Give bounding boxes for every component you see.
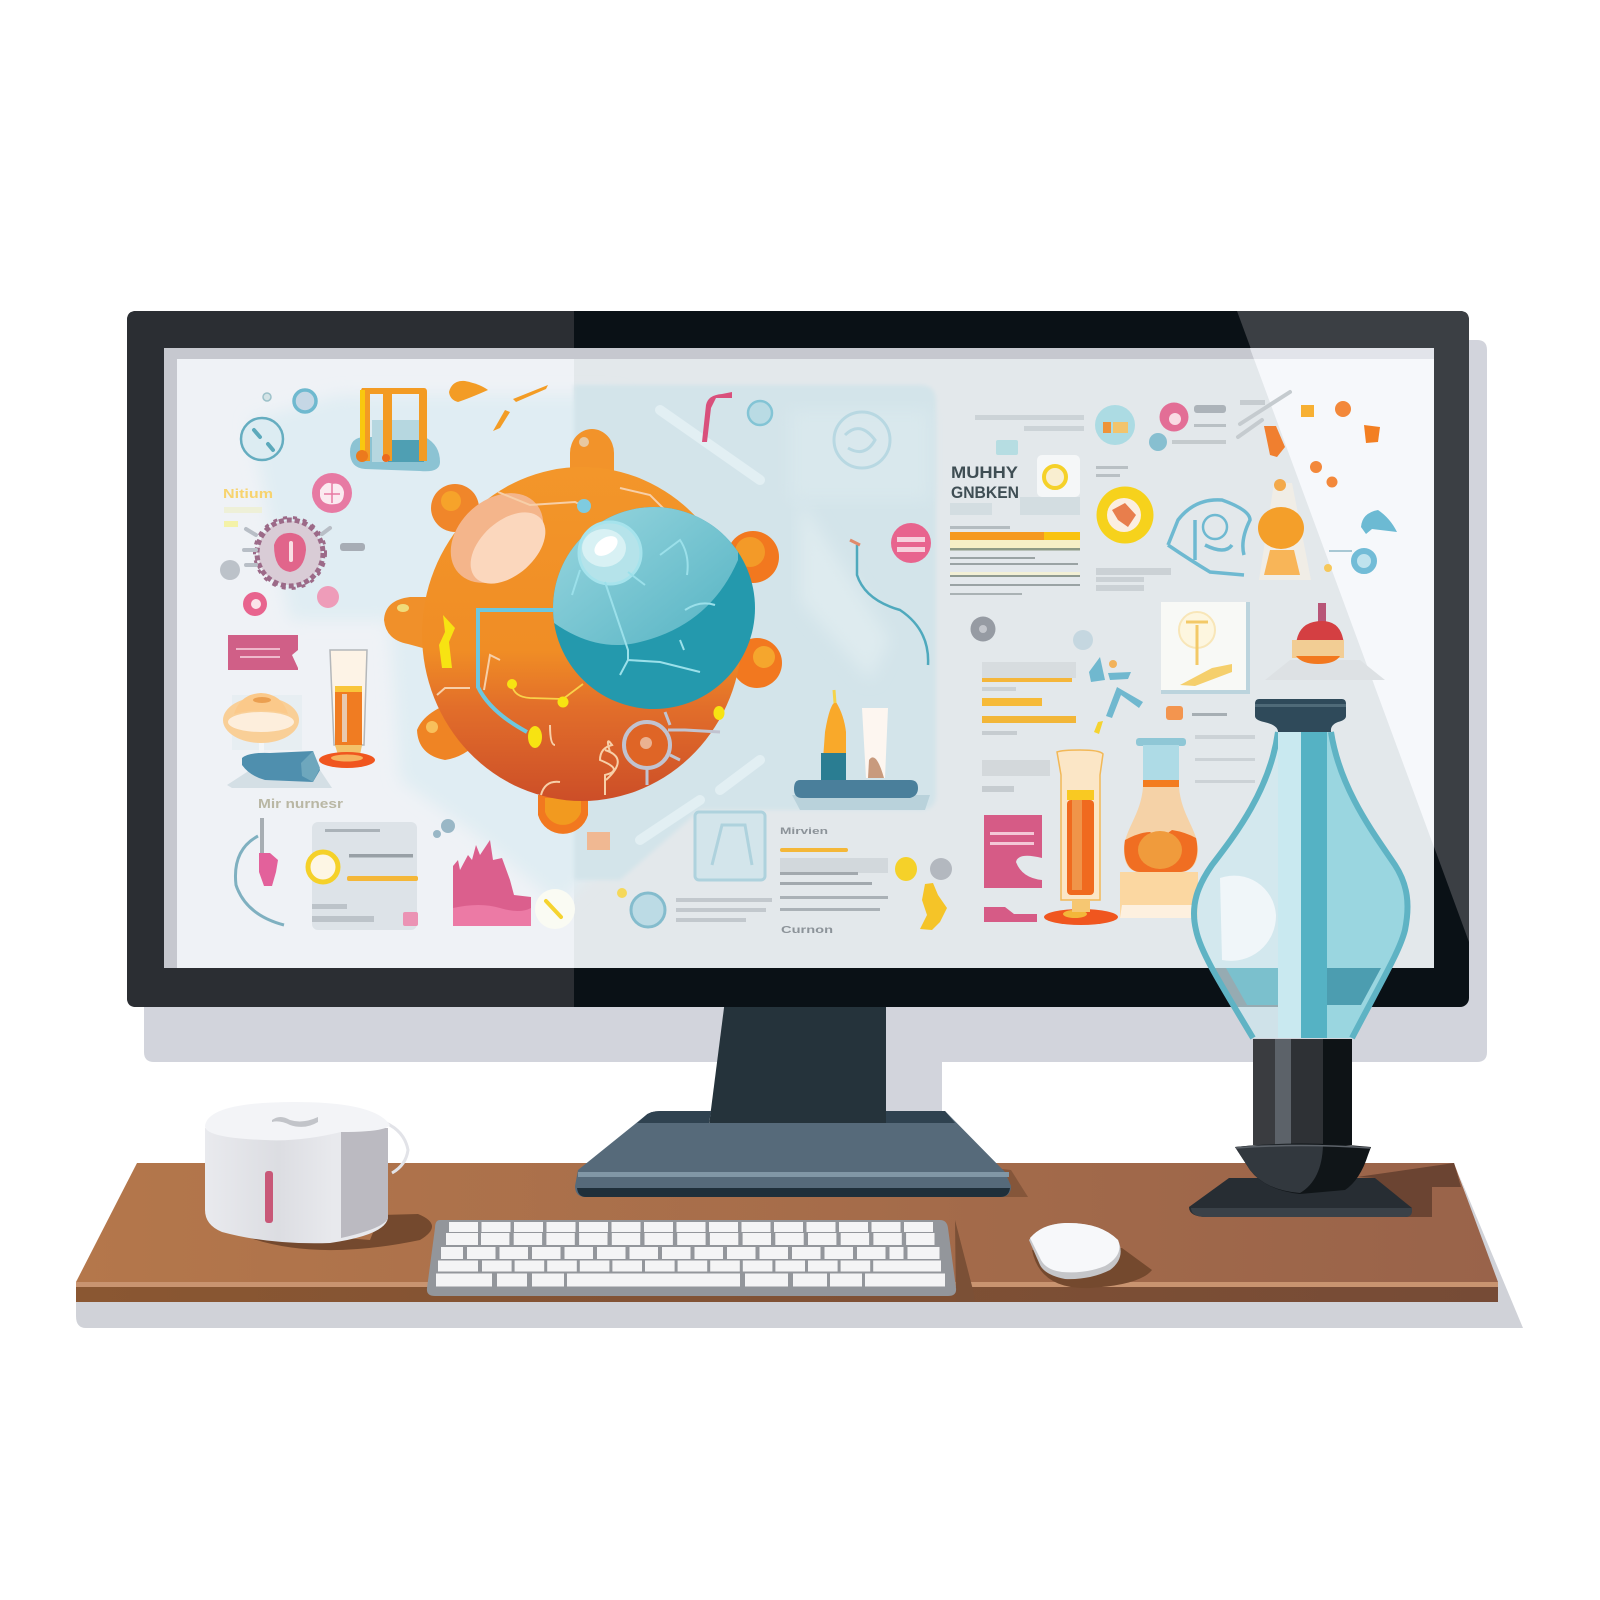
mug pink bar (265, 1171, 273, 1223)
icon: pink circle and curved pipe (850, 523, 931, 665)
blue pipe (478, 610, 553, 732)
mug shadow (226, 1214, 432, 1250)
monitor stand (575, 1000, 1028, 1197)
illustration: desk scene (76, 311, 1523, 1328)
vase body right half (1301, 732, 1408, 1038)
glass vase (1194, 699, 1408, 1038)
label card: pink (228, 635, 298, 670)
mug top (205, 1102, 390, 1140)
text block: bottom info (780, 826, 888, 936)
centre stripes (1278, 732, 1301, 1038)
icon: orange teardrop and strokes (449, 381, 548, 431)
panel: blue central backdrop (574, 385, 936, 880)
text block: gray lines bottom centre (676, 898, 772, 922)
icon: pink circle with lines (1149, 402, 1226, 451)
icon: blue swirl (1168, 500, 1250, 575)
mug handle (378, 1120, 408, 1173)
icon: blue ring bottom (617, 888, 665, 927)
cracks (437, 488, 665, 795)
bumps (384, 429, 782, 834)
icon: orange sticky (587, 832, 610, 850)
icon: clock (241, 418, 283, 460)
outline (1194, 732, 1408, 1038)
keys (436, 1227, 945, 1280)
icon: bubbles (433, 819, 455, 838)
label: yellow heading left: Nitium (223, 486, 273, 501)
icon: gray plant and orange stem (1238, 392, 1290, 457)
dark reflected bands (1226, 968, 1278, 1005)
panel: small gray info card (308, 822, 418, 930)
icon: blue bubble (748, 401, 772, 425)
text block: bottom info: Curnon (781, 925, 833, 936)
icon: red cap device (1265, 603, 1385, 680)
panel: heading with bars (950, 440, 1080, 595)
computer mouse (1029, 1223, 1152, 1288)
icon: bowl (223, 693, 299, 743)
keyboard (427, 1220, 975, 1302)
icon: blue tray (227, 751, 332, 788)
pale wash behind graphic (260, 396, 574, 894)
icon: pink brain circle (312, 473, 352, 513)
vase stand (1189, 1039, 1461, 1217)
icon: test tube left (319, 650, 375, 768)
text block: gray short lines (1096, 466, 1128, 477)
monitor frame (127, 311, 1469, 1007)
icon: pink hook (702, 392, 732, 442)
icon: lava lamp (1258, 479, 1311, 580)
text block: orange bars (982, 662, 1076, 792)
ring cell (624, 722, 670, 768)
monitor screen (164, 348, 1434, 968)
icon: faint doodle in panel (834, 412, 890, 468)
label: yellow heading left (223, 486, 273, 527)
icon: small circles top-left (263, 390, 316, 412)
icons: gray and pale circles (970, 616, 1093, 650)
chart: pink area chart (453, 840, 531, 926)
text block: bottom info: Mirvien (780, 826, 828, 836)
icon: orange square with lines (1166, 706, 1255, 783)
coffee mug (205, 1102, 432, 1250)
icons: orange scattered dots (1301, 401, 1380, 488)
vase body left half (1194, 732, 1301, 1038)
icon: orange frame on tray (350, 388, 440, 471)
icons: blue arrows (1089, 657, 1143, 734)
label: mixed heading bottom-left: Mir nurnesr (258, 796, 343, 811)
blue sphere (553, 507, 755, 709)
highlight (450, 493, 544, 583)
icon: orange flask (1120, 738, 1198, 918)
panel: lamp card (1161, 602, 1248, 692)
panel: heading with bars: MUHHY (951, 463, 1019, 482)
highlight circle (1220, 876, 1276, 961)
icons: yellow gray dots and figure (895, 857, 952, 930)
icon: tall test tube (1044, 750, 1118, 925)
icon: arc with pink pipette (235, 818, 284, 925)
icon: faded blue box (695, 812, 765, 880)
desk (76, 1163, 1523, 1328)
icon: virus cell (220, 518, 365, 616)
icons: blue blob and key (1324, 510, 1397, 572)
icon: candle tube on base (792, 690, 930, 810)
mug body (205, 1128, 388, 1243)
text: lines in pink card (990, 832, 1034, 845)
text block: lines under swirl (1096, 568, 1171, 591)
icon: white circle with yellow slash (535, 889, 575, 929)
icon: sphere with bumps (384, 429, 782, 834)
icon: yellow circle with orange blot (1096, 486, 1154, 544)
icon: blue circle with tray (1095, 405, 1135, 445)
text block: top right header lines (975, 415, 1084, 431)
vase cap (1255, 699, 1346, 732)
icon: pink cards right (984, 815, 1042, 922)
reflection regions (574, 348, 1434, 968)
panel: heading with bars: GNBKEN (951, 483, 1019, 502)
backdrop shadow (144, 340, 1487, 1111)
